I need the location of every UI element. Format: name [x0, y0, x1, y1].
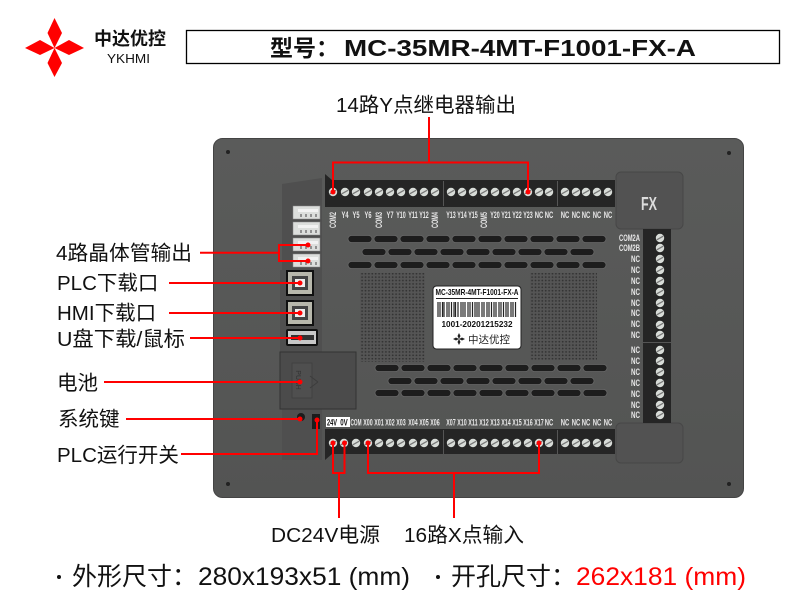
- device label sticker: [433, 286, 521, 349]
- callout: 16路X点输入: 16路X点输入: [404, 524, 524, 547]
- bottom terminal labels: X12: [479, 418, 489, 428]
- right terminal labels: NC: [631, 378, 640, 388]
- callout: 系统键: [58, 408, 302, 431]
- bottom terminal labels: NC: [593, 418, 602, 428]
- top terminal labels: NC: [535, 210, 544, 220]
- brand latin name: YKHMI: [107, 51, 150, 66]
- icon: red diamond star: [25, 18, 84, 77]
- callout: 4路晶体管输出: [56, 242, 310, 265]
- panel: device rear: [214, 138, 744, 498]
- corner screw holes: [226, 150, 731, 486]
- top terminal labels: Y21: [501, 210, 511, 220]
- top terminal labels: Y22: [512, 210, 522, 220]
- cutout dimensions: [436, 563, 746, 591]
- sticker logo: [453, 333, 465, 345]
- callout: 电池: 电池: [57, 372, 98, 395]
- right terminal labels: NC: [631, 308, 640, 318]
- left port recess: [280, 178, 322, 460]
- right terminal labels: [619, 233, 640, 420]
- right terminal labels: NC: [631, 367, 640, 377]
- top terminal labels: Y5: [352, 210, 360, 220]
- callout: U盘下载/鼠标: [57, 328, 302, 351]
- HMI USB-B port: [286, 300, 314, 326]
- callout: 14路Y点继电器输出: [330, 94, 530, 194]
- right terminal labels: NC: [631, 389, 640, 399]
- housing: [214, 138, 744, 498]
- run switch: [312, 414, 320, 429]
- callout: PLC下载口: [57, 272, 302, 295]
- callout: 14路Y点继电器输出: 14路Y点继电器输出: [336, 94, 516, 117]
- top terminal labels: COM5: [479, 212, 489, 228]
- cutout dimensions: 262x181 (mm): [576, 563, 746, 591]
- top terminal labels: NC: [561, 210, 570, 220]
- battery cover: [280, 352, 356, 409]
- speaker grille right: [530, 273, 597, 360]
- right terminal labels: NC: [631, 345, 640, 355]
- bottom terminal labels: X06: [430, 418, 440, 428]
- bottom terminal labels: X17: [534, 418, 544, 428]
- battery cover: PUSH: [294, 370, 301, 390]
- top terminal labels: Y6: [364, 210, 372, 220]
- callout: HMI下载口: HMI下载口: [57, 302, 156, 325]
- device label sticker: 中达优控: [468, 333, 510, 346]
- bottom terminal labels: X07: [446, 418, 456, 428]
- right terminal labels: NC: [631, 287, 640, 297]
- top terminal labels: [328, 210, 613, 228]
- system key: [297, 413, 305, 421]
- FX tab top: [616, 172, 683, 229]
- FX tab bottom: [616, 423, 683, 463]
- top terminal labels: Y20: [490, 210, 500, 220]
- top terminal labels: Y4: [342, 210, 348, 220]
- speaker grille left: [360, 273, 425, 362]
- title box: [186, 30, 780, 64]
- callout: DC24V电源: DC24V电源: [271, 524, 380, 547]
- top terminal labels: Y14: [457, 210, 467, 220]
- callout: HMI下载口: [57, 302, 302, 325]
- bottom terminal labels: NC: [545, 418, 554, 428]
- outline dimensions: [57, 563, 410, 591]
- right terminal labels: COM2B: [619, 243, 640, 253]
- cutout dimensions: 开孔尺寸：: [451, 563, 576, 591]
- bottom terminal labels: X04: [408, 418, 418, 428]
- bottom terminal labels: NC: [561, 418, 570, 428]
- bottom terminal labels: NC: [604, 418, 613, 428]
- bottom terminal labels: [326, 417, 613, 428]
- device label sticker: 1001-20201215232: [441, 320, 513, 329]
- top terminal labels: NC: [604, 210, 613, 220]
- top terminal labels: NC: [593, 210, 602, 220]
- bottom terminal block: [325, 429, 615, 460]
- bottom terminal labels: X05: [419, 418, 429, 428]
- right terminal labels: NC: [631, 265, 640, 275]
- bottom terminal labels: X15: [512, 418, 522, 428]
- title box: MC-35MR-4MT-F1001-FX-A: [344, 35, 696, 61]
- USB-A port: [286, 329, 318, 346]
- barcode: [438, 302, 516, 317]
- callout: 系统键: 系统键: [58, 408, 120, 431]
- bottom terminal labels: X13: [490, 418, 500, 428]
- bottom terminal labels: 24V: [327, 418, 337, 428]
- top terminal labels: COM3: [374, 212, 384, 228]
- transistor output connectors: [293, 206, 320, 267]
- bottom terminal labels: X14: [501, 418, 511, 428]
- callout: PLC运行开关: [57, 418, 320, 467]
- bottom terminal labels: X02: [385, 418, 395, 428]
- callout: 4路晶体管输出: 4路晶体管输出: [56, 242, 192, 265]
- brand name: 中达优控: [94, 28, 166, 49]
- right terminal labels: NC: [631, 400, 640, 410]
- callout: U盘下载/鼠标: U盘下载/鼠标: [57, 328, 185, 351]
- top terminal labels: Y12: [419, 210, 429, 220]
- device label sticker: MC-35MR-4MT-F1001-FX-A: [436, 288, 519, 297]
- FX tab top: FX: [641, 194, 657, 214]
- bottom terminal labels: X01: [374, 418, 384, 428]
- bottom terminal labels: NC: [572, 418, 581, 428]
- right terminal block: [643, 229, 671, 423]
- right terminal labels: NC: [631, 356, 640, 366]
- top terminal labels: NC: [582, 210, 591, 220]
- vents: [348, 236, 607, 396]
- PLC USB-B port: [286, 270, 314, 296]
- callout: DC24V电源: [271, 440, 380, 547]
- callout: PLC运行开关: PLC运行开关: [57, 444, 179, 467]
- top terminal block: [325, 174, 615, 207]
- top terminal labels: NC: [545, 210, 554, 220]
- right terminal labels: COM2A: [619, 233, 640, 243]
- top terminal labels: Y11: [408, 210, 418, 220]
- top terminal labels: COM4: [430, 212, 440, 228]
- callout: 电池: [57, 372, 302, 395]
- top terminal labels: Y7: [386, 210, 394, 220]
- top terminal labels: Y13: [446, 210, 456, 220]
- top terminal labels: COM2: [328, 212, 338, 228]
- outline dimensions: 外形尺寸：: [72, 563, 197, 591]
- right terminal labels: NC: [631, 319, 640, 329]
- bottom terminal labels: X03: [396, 418, 406, 428]
- bottom terminal labels: X10: [457, 418, 467, 428]
- callout: 16路X点输入: [366, 440, 542, 547]
- top terminal labels: Y15: [468, 210, 478, 220]
- logo: [25, 18, 166, 77]
- bottom terminal labels: NC: [582, 418, 591, 428]
- outline dimensions: 280x193x51 (mm): [198, 563, 410, 591]
- right terminal labels: NC: [631, 276, 640, 286]
- bottom terminal labels: X11: [468, 418, 478, 428]
- title box: 型号：: [270, 35, 339, 61]
- bottom terminal labels: 0V: [340, 418, 348, 428]
- top terminal labels: Y23: [523, 210, 533, 220]
- right terminal labels: NC: [631, 410, 640, 420]
- top terminal labels: Y10: [396, 210, 406, 220]
- right terminal labels: NC: [631, 298, 640, 308]
- top terminal labels: NC: [572, 210, 581, 220]
- bottom terminal labels: X00: [363, 418, 373, 428]
- right terminal labels: NC: [631, 330, 640, 340]
- bottom terminal labels: COM: [350, 418, 362, 428]
- callout: PLC下载口: PLC下载口: [57, 272, 158, 295]
- right terminal labels: NC: [631, 254, 640, 264]
- bottom terminal labels: X16: [523, 418, 533, 428]
